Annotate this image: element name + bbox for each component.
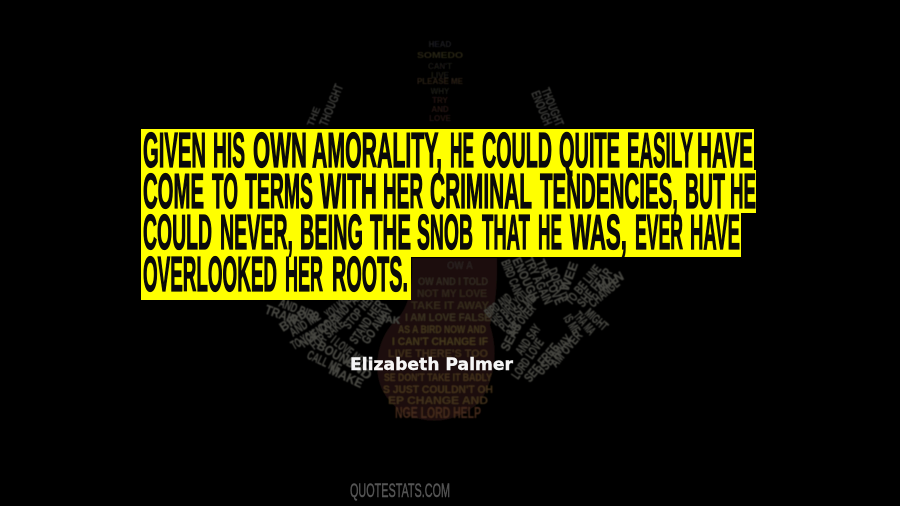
- quote line 3: THAT: [482, 206, 530, 260]
- right lower wing: SAY OVER: [503, 301, 539, 340]
- infographic canvas: HAVE: [690, 206, 740, 260]
- quote line 2: TENDENCIES,: [540, 165, 678, 219]
- quote line 2: WITH: [320, 165, 377, 219]
- right lower wing: AM OVER: [547, 328, 586, 370]
- quote line 3: SNOB: [417, 206, 473, 260]
- guitar body: NOT MY LOVE: [417, 288, 487, 300]
- quote line 1: COULD: [482, 124, 552, 178]
- right lower wing: SHE FEAR: [574, 265, 615, 310]
- left lower wing: NGE COR: [297, 311, 341, 350]
- guitar body: S JUST COULDN'T OH: [383, 384, 493, 396]
- left lower wing: I LOVE NOT: [328, 333, 371, 370]
- right lower wing: LORD LOVE: [508, 335, 547, 382]
- strip line 3: [141, 212, 741, 257]
- strip line 1: [141, 129, 754, 171]
- upper wing tips: THE: [306, 105, 323, 128]
- left lower wing: [263, 287, 401, 391]
- quote line 2: BUT: [685, 165, 725, 219]
- right lower wing: DOES IT: [545, 266, 572, 303]
- guitar body: TAKE IT AWAY: [411, 300, 490, 312]
- guitar headstock and neck: LIVE: [431, 71, 450, 80]
- left lower wing: TRAIN: [263, 302, 300, 327]
- guitar body: OW AND I TOLD: [418, 276, 488, 288]
- guitar headstock and neck: [417, 40, 464, 123]
- quote line 3: BEING: [300, 206, 363, 260]
- right lower wing: [482, 255, 626, 385]
- site watermark: QUOTESTATS.COM: [350, 481, 450, 502]
- guitar body: I AM LOVE FALSE: [405, 312, 491, 324]
- right lower wing: USE AWAY: [533, 331, 575, 378]
- right lower wing: HIS BIRD YOU: [488, 288, 531, 328]
- quote line 1: QUITE: [559, 124, 620, 178]
- guitar body: AS A BIRD NOW AND: [398, 324, 486, 336]
- quote line 3: EVER: [635, 206, 683, 260]
- quote line 1: HIS: [213, 124, 245, 178]
- quote line 1: AMORALITY,: [312, 124, 442, 178]
- guitar headstock and neck: TRY: [432, 96, 449, 105]
- guitar body: OW A: [447, 260, 473, 272]
- quote line 3: COULD: [143, 206, 212, 260]
- left lower wing: TO YOU NOT: [288, 318, 334, 353]
- left lower wing: GO AWAY: [358, 302, 396, 347]
- right lower wing: WEE: [557, 259, 581, 293]
- right lower wing: IS ME: [560, 312, 584, 337]
- right lower wing: THA MA: [571, 308, 599, 338]
- quote line 2: CRIMINAL: [430, 165, 532, 219]
- upper wing tips: THOUGHT: [316, 82, 346, 128]
- guitar headstock and neck: AND: [431, 105, 449, 114]
- guitar headstock and neck: WHY: [431, 87, 450, 96]
- right lower wing: TRY AGAIN: [521, 255, 556, 307]
- left lower wing: AND ME: [286, 308, 323, 340]
- right lower wing: TO BE LINE: [562, 261, 604, 308]
- guitar headstock and neck: CAN'T: [428, 62, 452, 71]
- guitar headstock and neck: LOVE: [429, 114, 452, 123]
- guitar body: NGE LORD HELP: [395, 405, 481, 422]
- left lower wing: CALL ME: [305, 347, 344, 376]
- quote line 2: COME: [143, 165, 204, 219]
- right lower wing: PLEASE ME: [496, 291, 539, 334]
- right lower wing: CHANGE: [585, 276, 623, 310]
- infographic canvas: HAVE: [697, 124, 753, 178]
- upper wing tips: ENOUGH: [528, 89, 556, 128]
- strip line 4: [141, 256, 411, 300]
- left lower wing: YOU KNOW: [322, 287, 359, 321]
- quote text: ROOTS.: [332, 248, 408, 302]
- quote line 2: HER: [383, 165, 423, 219]
- quote line 3: [143, 206, 740, 260]
- right lower wing: SEE FREE: [521, 340, 562, 385]
- left lower wing: TAK: [380, 314, 401, 327]
- left lower wing: AND: [342, 353, 375, 383]
- author name: Elizabeth Palmer: [350, 355, 514, 375]
- quote line 4: HER: [285, 248, 323, 302]
- right lower wing: BIRD CAN: [498, 258, 526, 297]
- quote line 2: [143, 165, 756, 219]
- quote line 3: WAS,: [570, 206, 627, 260]
- quote line 2: TERMS: [245, 165, 313, 219]
- left lower wing: STAND HER: [346, 297, 387, 347]
- quote line 4: OVERLOOKED: [143, 248, 277, 302]
- left lower wing: STOP HER: [340, 290, 379, 332]
- right lower wing: MAN: [594, 268, 626, 295]
- upper wing tips: THOUGHT: [538, 86, 567, 128]
- quote text: [143, 124, 756, 302]
- quote line 2: TO: [212, 165, 238, 219]
- left lower wing: BIRD: [276, 306, 310, 335]
- quote line 3: NEVER,: [220, 206, 293, 260]
- quote line 1: HE: [450, 124, 474, 178]
- guitar body: EP CHANGE AND: [388, 395, 488, 407]
- guitar headstock and neck: HEAD: [429, 40, 452, 49]
- quote line 3: THE: [370, 206, 411, 260]
- guitar headstock and neck: SOMEDO: [417, 51, 463, 60]
- left lower wing: AND BIRD: [277, 295, 321, 325]
- guitar body: [377, 258, 497, 422]
- right lower wing: MIGHT: [582, 305, 611, 334]
- quote highlight strips: [141, 129, 756, 300]
- quote line 1: EASILY: [627, 124, 693, 178]
- left lower wing: AND I AM: [330, 288, 366, 324]
- strip line 2: [141, 170, 756, 213]
- guitar and wings word-art: [263, 40, 626, 422]
- quote line 3: HE: [538, 206, 562, 260]
- guitar body: SE DON'T TAKE IT BADLY: [384, 372, 493, 384]
- left lower wing: BOUND: [314, 338, 358, 372]
- right lower wing: AND SAY: [512, 321, 544, 358]
- right lower wing: BIRD AND: [482, 290, 514, 320]
- right lower wing: THE LOVE: [533, 257, 567, 307]
- right lower wing: ENOUGH: [509, 255, 542, 303]
- left lower wing: FOR SAKE: [307, 316, 348, 352]
- quote line 1: [143, 124, 753, 178]
- guitar headstock and neck: PLEASE ME: [417, 77, 464, 86]
- upper wing tips: [306, 82, 567, 128]
- infographic canvas: HE: [730, 165, 756, 219]
- right lower wing: SEAS: [497, 320, 525, 353]
- quote line 1: OWN: [253, 124, 307, 178]
- quote line 1: GIVEN: [143, 124, 206, 178]
- guitar body: I CAN'T CHANGE IF: [392, 336, 488, 348]
- left lower wing: MAKE: [327, 362, 366, 391]
- guitar body: LIVE THERE'S TOO: [388, 348, 488, 360]
